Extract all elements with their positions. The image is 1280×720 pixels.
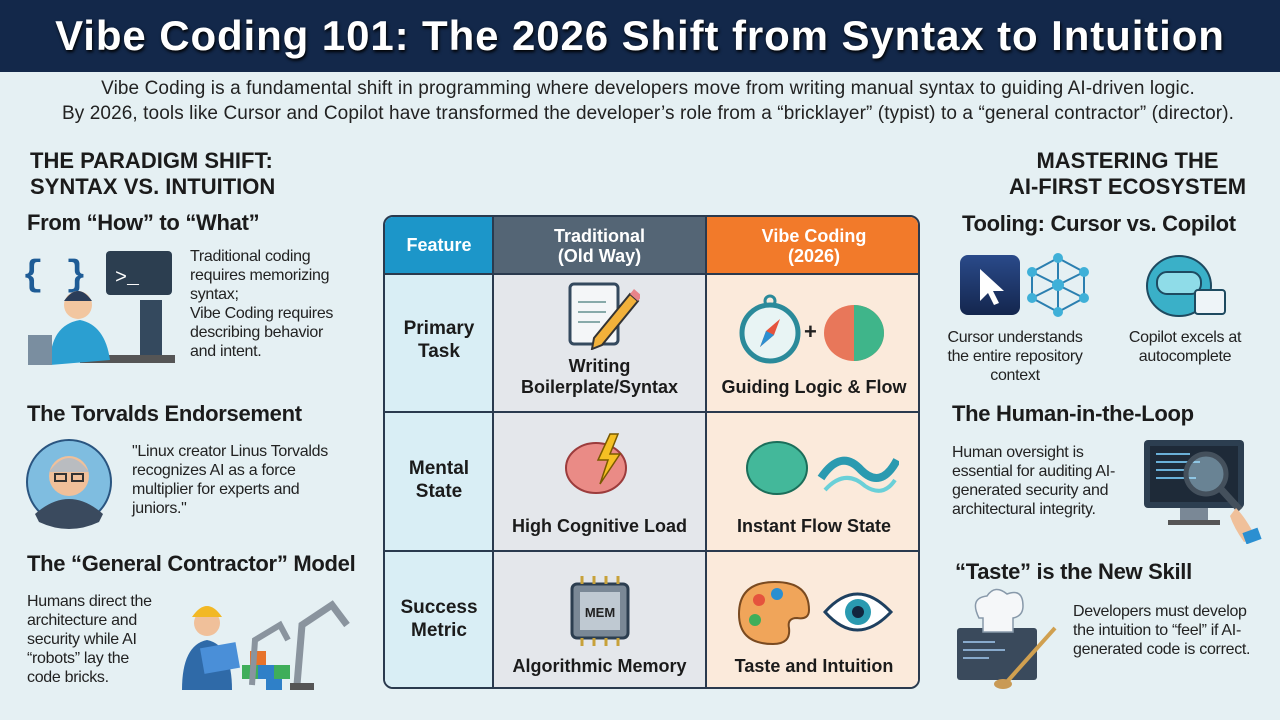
header: traditional: Traditional: [554, 226, 645, 246]
intro text: Vibe Coding is a fundamental shift in programming where developers move from writing manual syntax to guiding AI-driven logic.: [101, 78, 1195, 99]
traditional column: [493, 274, 706, 691]
icon: linus avatar: [26, 439, 112, 529]
row label: primary task: [404, 318, 474, 362]
row label: success metric: Metric: [411, 620, 467, 641]
title bar: [0, 0, 1280, 72]
heading: general contractor: The “General Contractor” Model: [27, 551, 355, 576]
icon: coder at computer: [22, 251, 175, 365]
cell: taste and intuition: [734, 581, 893, 676]
caption: copilot: Copilot excels at autocomplete: [1129, 329, 1241, 365]
header: vibe coding: [706, 217, 922, 274]
cell: guiding logic: +: [804, 319, 817, 344]
icon: coder at computer: >_: [115, 267, 140, 290]
header: feature: Feature: [406, 235, 472, 255]
intro text: [62, 78, 1234, 124]
cell: high cognitive load: High Cognitive Load: [512, 516, 687, 536]
row label: primary task: Primary: [404, 318, 474, 339]
row label: success metric: Success: [400, 597, 478, 618]
left heading: [30, 148, 275, 199]
cell: writing boilerplate: Boilerplate/Syntax: [521, 377, 678, 397]
text: from how to what: [190, 248, 333, 360]
cell: high cognitive load: [512, 433, 687, 536]
icon: coder at computer: { }: [22, 255, 87, 296]
text: contractor: Humans direct the architecture and security while AI “robots” lay the code bricks.: [27, 593, 152, 686]
quote text: "Linux creator Linus Torvalds recognizes AI as a force multiplier for experts and juniors.": [132, 443, 328, 517]
icon: network: [1027, 253, 1089, 317]
heading: taste: “Taste” is the New Skill: [955, 559, 1192, 584]
left heading: SYNTAX VS. INTUITION: [30, 174, 275, 199]
intro text: By 2026, tools like Cursor and Copilot have transformed the developer’s role from a “bricklayer” (typist) to a “general contractor” (director).: [62, 103, 1234, 124]
comparison table: [383, 215, 920, 689]
row label: mental state: [409, 458, 469, 502]
header: vibe coding: Vibe Coding: [762, 226, 866, 246]
row label: mental state: Mental: [409, 458, 469, 479]
cell: guiding logic: [722, 294, 906, 397]
heading: tooling: Tooling: Cursor vs. Copilot: [962, 211, 1236, 236]
text: taste: Developers must develop the intuition to “feel” if AI-generated code is correct.: [1073, 603, 1250, 658]
right heading: AI-FIRST ECOSYSTEM: [1009, 174, 1246, 199]
row label: success metric: [400, 597, 478, 641]
text: human in loop: Human oversight is essential for auditing AI-generated security and architectural integrity.: [952, 444, 1115, 518]
text: from how to what: Traditional coding requires memorizing syntax;: [190, 248, 329, 303]
caption: cursor: Cursor understands the entire repository context: [947, 329, 1083, 384]
cell: algorithmic memory: MEM: [584, 605, 615, 620]
right heading: MASTERING THE: [1036, 148, 1219, 173]
row label: mental state: State: [416, 481, 462, 502]
cell: instant flow state: Instant Flow State: [737, 516, 891, 536]
cell: taste and intuition: Taste and Intuition: [735, 656, 893, 676]
heading: human in loop: The Human-in-the-Loop: [952, 401, 1194, 426]
cell: algorithmic memory: Algorithmic Memory: [512, 656, 687, 676]
cell: writing boilerplate: [521, 282, 678, 397]
icon: cursor app: [960, 255, 1020, 315]
icon: worker with robots: [182, 600, 350, 690]
right heading: [1009, 148, 1246, 199]
cell: instant flow state: [737, 441, 899, 536]
feature column: [385, 274, 493, 691]
icon: chef hat and spoon: [957, 588, 1056, 689]
icon: monitor with magnifier: [1144, 440, 1262, 544]
icon: copilot: [1146, 255, 1226, 317]
cell: guiding logic: Guiding Logic & Flow: [722, 377, 906, 397]
left heading: THE PARADIGM SHIFT:: [30, 148, 273, 173]
header: traditional: (Old Way): [558, 246, 641, 266]
header: traditional: [493, 217, 706, 274]
text: from how to what: Vibe Coding requires describing behavior and intent.: [190, 305, 333, 360]
row label: primary task: Task: [418, 341, 460, 362]
heading: from how to what: From “How” to “What”: [27, 210, 259, 235]
header: vibe coding: (2026): [788, 246, 840, 266]
vibe column: [706, 274, 922, 691]
header: feature: [385, 217, 493, 274]
cell: algorithmic memory: [512, 576, 687, 676]
title bar: Vibe Coding 101: The 2026 Shift from Syntax to Intuition: [55, 12, 1225, 59]
cell: writing boilerplate: Writing: [569, 356, 630, 376]
heading: torvalds: The Torvalds Endorsement: [27, 401, 302, 426]
